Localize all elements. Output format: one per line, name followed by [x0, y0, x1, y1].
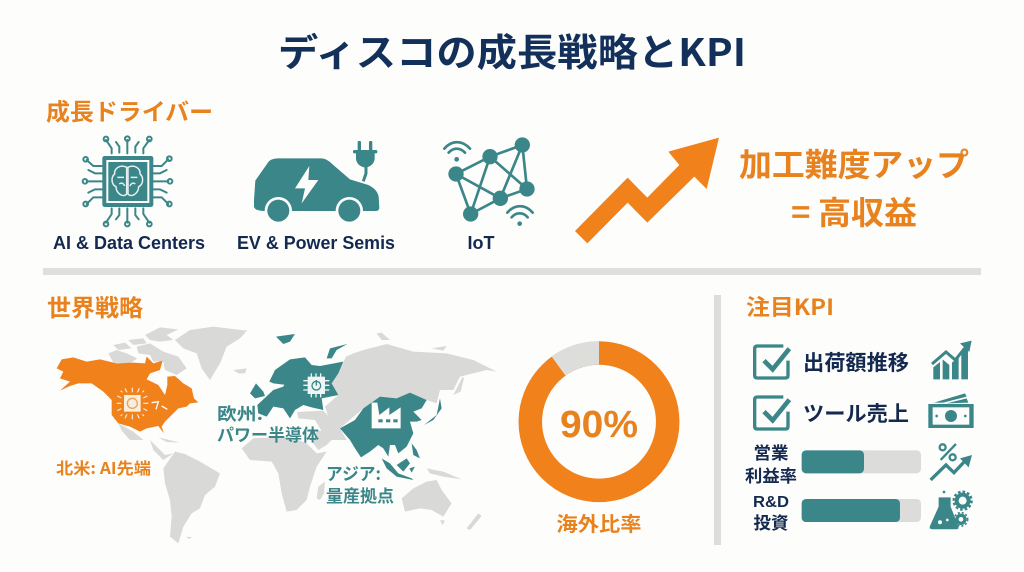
- icon: AI chip: [83, 136, 172, 226]
- map label: Europe: [217, 400, 319, 446]
- donut value: 90%: [560, 404, 638, 446]
- map: Eurasia: [240, 330, 497, 457]
- map: Europe power icon: [303, 373, 329, 397]
- map: Americas north: [57, 327, 247, 440]
- KPI rows: [755, 341, 974, 529]
- title: ディスコの成長戦略とKPI: [278, 22, 746, 77]
- checkbox 2: [755, 397, 789, 429]
- map label: Asia: 量産拠点: [326, 482, 394, 507]
- icon: percent trend: [931, 444, 972, 480]
- KPI label: operating margin: [745, 439, 797, 487]
- arrow: rising zigzag: [575, 138, 719, 243]
- heading: global strategy: 世界戦略: [47, 289, 144, 323]
- label: IoT: IoT: [468, 233, 494, 253]
- KPI label: R&D investment: R&D: [753, 494, 789, 511]
- bar: R&D investment: [802, 499, 921, 522]
- icon: growth bars: [932, 341, 972, 379]
- KPI text: shipments: 出荷額推移: [803, 347, 909, 377]
- KPI text: tool sales: ツール売上: [803, 398, 909, 428]
- label: AI and data centers: AI & Data Centers: [53, 233, 205, 253]
- icon: banknotes: [928, 393, 974, 428]
- KPI label: R&D investment: 投資: [754, 509, 788, 534]
- callout: higher difficulty equals high margin: [739, 140, 969, 234]
- label: overseas ratio: 海外比率: [556, 508, 642, 537]
- map label: Asia: アジア:: [326, 460, 381, 485]
- map: southern continents and islands: [150, 430, 482, 543]
- map label: Asia: [326, 460, 394, 507]
- heading: growth drivers: 成長ドライバー: [46, 93, 213, 127]
- map label: Europe: パワー半導体: [217, 421, 319, 446]
- map: Asia factory icon: [372, 403, 401, 428]
- map: North America chip icon: [117, 388, 148, 419]
- heading: KPI: 注目KPI: [746, 290, 834, 322]
- label: EV and power semis: EV & Power Semis: [237, 233, 395, 253]
- icon: IoT network: [444, 137, 535, 226]
- icon: EV car with plug: [254, 141, 379, 225]
- bar: operating margin: [802, 450, 921, 473]
- icon: flask and gears: [930, 491, 972, 529]
- world map: [57, 327, 497, 543]
- callout: higher difficulty equals high margin: 加工難度アップ: [739, 140, 969, 186]
- checkbox 1: [755, 346, 789, 378]
- KPI label: operating margin: 営業: [754, 439, 788, 464]
- KPI label: operating margin: 利益率: [745, 462, 797, 487]
- map label: Europe: 欧州:: [217, 400, 263, 425]
- KPI label: R&D investment: [753, 494, 789, 534]
- map label: North America: 北米: AI先端: [56, 455, 151, 479]
- donut chart: overseas ratio: [530, 353, 668, 490]
- callout: higher difficulty equals high margin: = 高収益: [791, 188, 917, 234]
